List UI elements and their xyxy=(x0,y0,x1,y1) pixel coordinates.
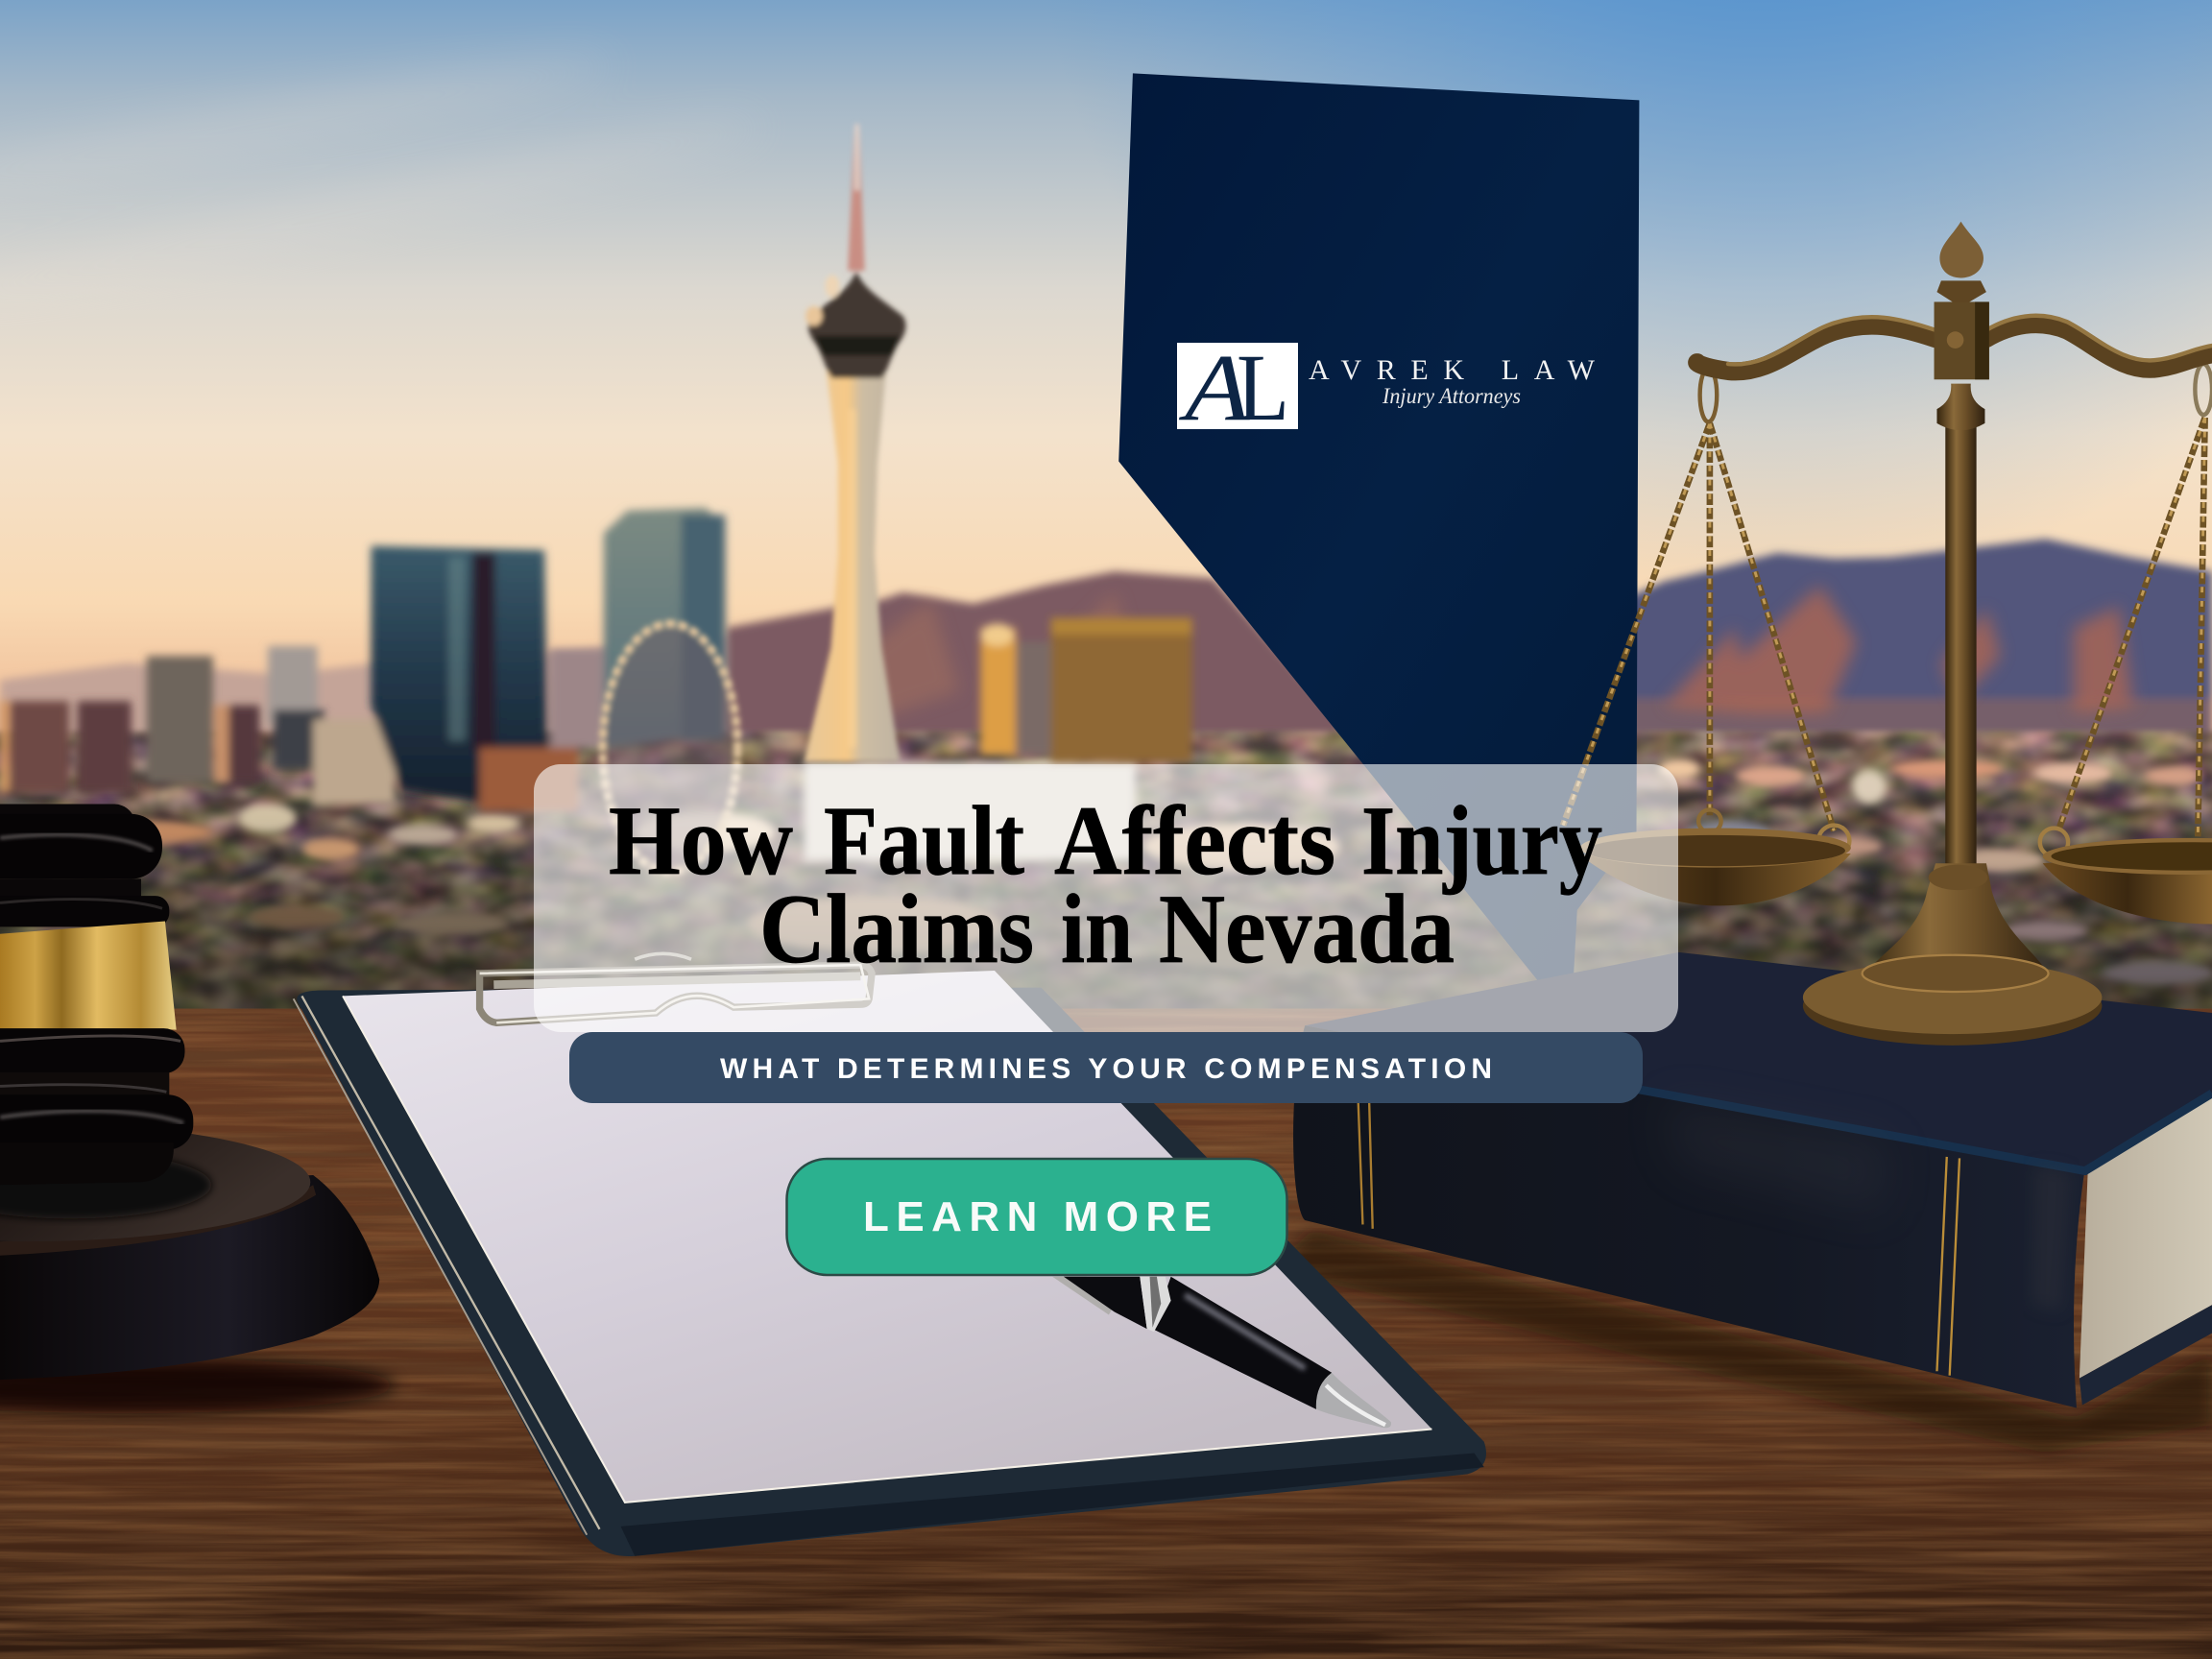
logo mark xyxy=(1177,334,1298,441)
title: Injury xyxy=(1361,786,1602,896)
firm tagline: Injury Attorneys xyxy=(1382,384,1521,408)
city bokeh band xyxy=(0,731,2212,1020)
title: Affects xyxy=(1054,786,1335,896)
sky xyxy=(0,0,2212,805)
clipboard metal clip xyxy=(480,953,872,1022)
pen xyxy=(1052,1277,1391,1428)
post xyxy=(1945,421,1977,869)
subtitle bar: WHAT DETERMINES YOUR COMPENSATION xyxy=(720,1053,1492,1085)
title xyxy=(609,786,1602,984)
right chains xyxy=(2040,364,2212,856)
gavel on sound block xyxy=(0,805,395,1413)
title: in xyxy=(1061,875,1133,984)
title: How xyxy=(609,786,793,896)
finial xyxy=(1939,222,1984,277)
mountains xyxy=(0,539,2212,790)
gavel head xyxy=(0,805,193,1185)
Nevada map silhouette xyxy=(1118,73,1639,988)
learn more button: LEARN MORE xyxy=(863,1193,1212,1240)
logo mark: L xyxy=(1237,334,1289,441)
ferris wheel xyxy=(602,623,737,872)
title panel xyxy=(534,764,1678,1032)
desk surface with wood grain xyxy=(0,1009,2212,1659)
logo mark: A xyxy=(1178,334,1251,441)
law book xyxy=(1269,952,2212,1453)
stand base xyxy=(1803,967,2102,1046)
firm logo on Nevada shape xyxy=(1177,334,1596,441)
scales of justice xyxy=(1563,222,2212,1046)
learn more button xyxy=(787,1159,1286,1275)
pans xyxy=(1580,854,1851,905)
subtitle bar xyxy=(569,1032,1643,1103)
clipboard xyxy=(294,971,1486,1556)
stratosphere tower xyxy=(805,124,905,761)
title: Nevada xyxy=(1159,875,1455,984)
firm name: AVREK LAW xyxy=(1309,354,1596,386)
title: Fault xyxy=(824,786,1024,896)
left chains xyxy=(1563,369,1849,856)
beam xyxy=(1697,316,2212,372)
paper sheet xyxy=(343,971,1431,1503)
title: Claims xyxy=(759,875,1034,984)
skyline buildings xyxy=(0,508,1192,811)
